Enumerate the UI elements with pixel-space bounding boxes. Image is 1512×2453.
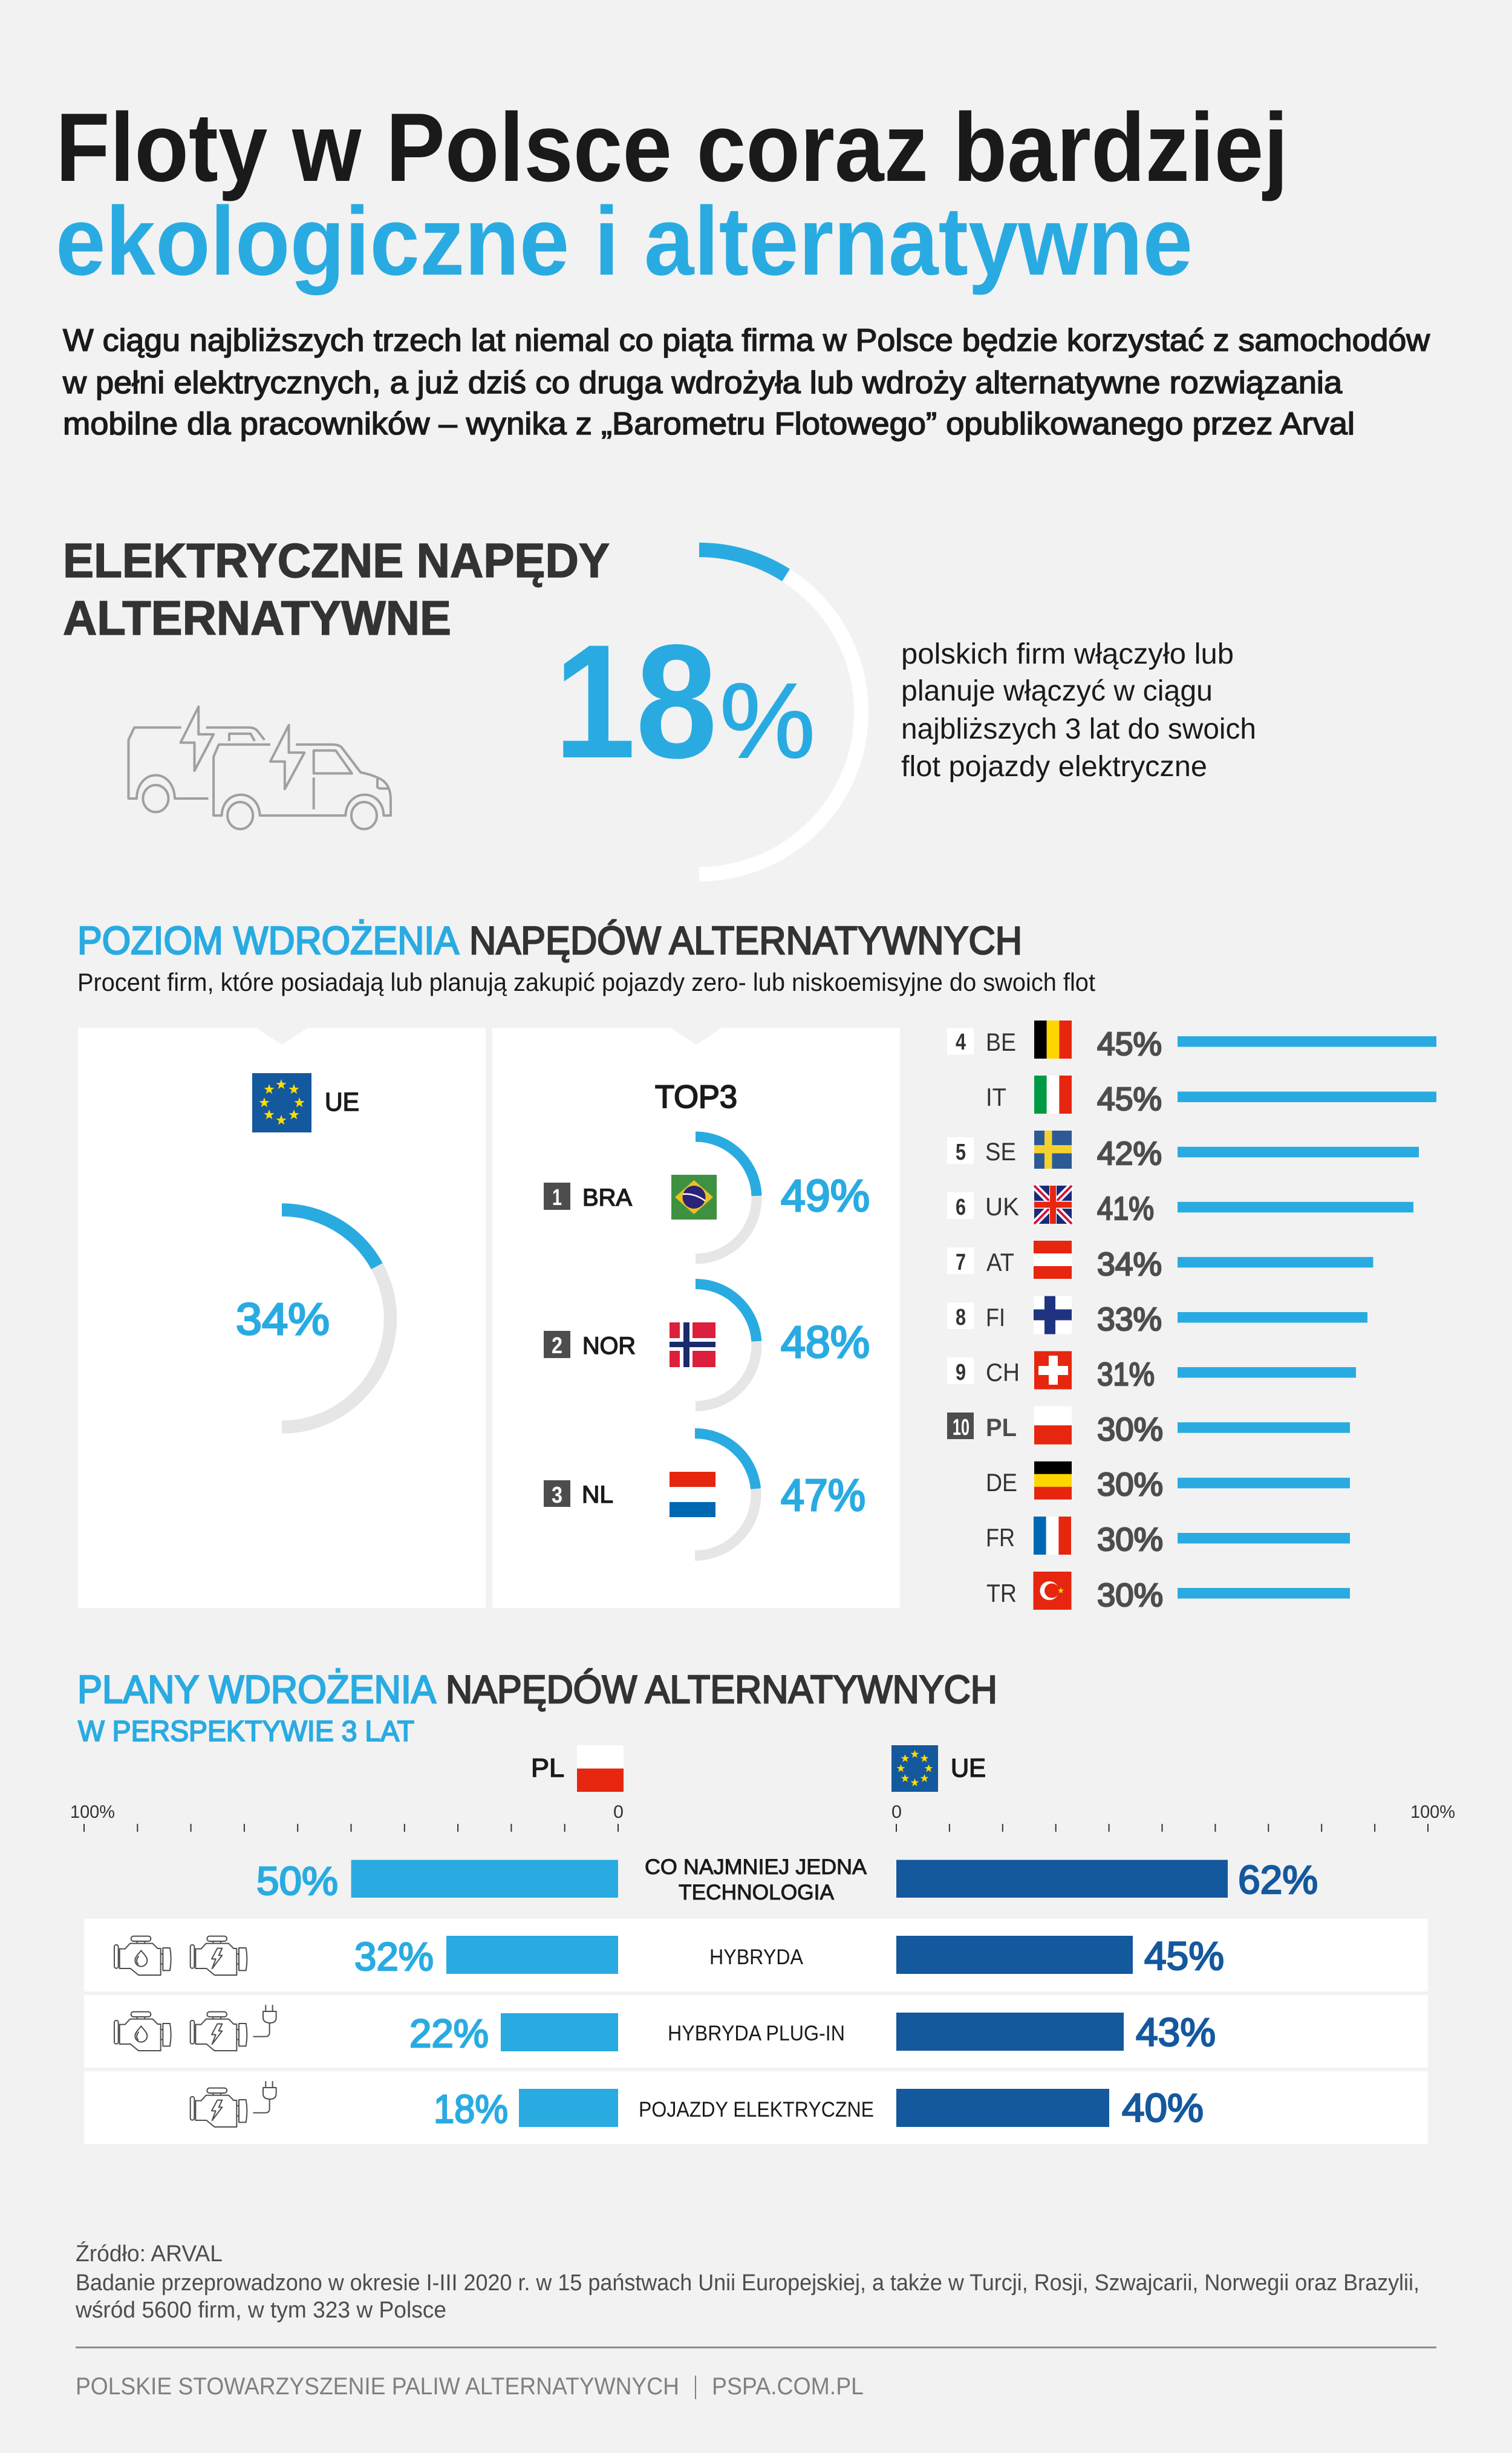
row: DE 30%: DE — [986, 1468, 1017, 1497]
row: PL 30%: PL — [986, 1413, 1017, 1442]
row: hybryda plug-in — [84, 1995, 1428, 2068]
row: FR 30%: FR — [986, 1523, 1015, 1552]
ranking list: countries — [947, 1021, 1436, 1613]
row: FI 33%: FI — [986, 1303, 1005, 1331]
footer: PSPA.COM.PL — [712, 2373, 864, 2400]
rank 1: Brazil — [544, 1137, 870, 1259]
row: IT 45%: 45% — [1097, 1081, 1162, 1117]
heading: poziom wdrożenia — [77, 918, 1022, 962]
source note — [75, 2241, 1419, 2323]
icon: electric engine with plug — [191, 2082, 276, 2127]
row: SE 42%: SE — [985, 1137, 1016, 1166]
row: co najmniej jedna technologia: 50% — [256, 1858, 338, 1903]
row: hybryda: 32% — [354, 1934, 434, 1979]
row: IT 45% — [986, 1076, 1436, 1117]
row: FI 33%: 8 — [956, 1305, 966, 1330]
row: CH 31% — [947, 1351, 1356, 1393]
row: AT 34%: 34% — [1097, 1246, 1162, 1282]
row: hybryda — [84, 1919, 1428, 1991]
row: SE 42%: 42% — [1097, 1135, 1162, 1172]
row: UK 41%: UK — [985, 1192, 1019, 1221]
row: co najmniej jedna technologia: TECHNOLOGIA — [679, 1881, 835, 1904]
text: 18% description: flot pojazdy elektryczne — [901, 751, 1207, 783]
rank 3: Netherlands: 47% — [781, 1470, 865, 1520]
icon: EU flag — [252, 1073, 311, 1132]
row: BE 45%: BE — [986, 1028, 1016, 1056]
source note: wśród 5600 firm, w tym 323 w Polsce — [75, 2298, 446, 2323]
big number 18%: 18 — [554, 610, 717, 792]
axis: UE: 0 — [891, 1802, 902, 1822]
row: pojazdy elektryczne: POJAZDY ELEKTRYCZNE — [639, 2098, 874, 2121]
row: FI 33%: 33% — [1097, 1301, 1162, 1338]
subheading: w perspektywie 3 lat: W PERSPEKTYWIE 3 LAT — [78, 1716, 414, 1748]
text: 18% description: polskich firm włączyło lub — [901, 638, 1234, 670]
icon: combustion and electric engines — [114, 1936, 247, 1975]
row: IT 45%: IT — [986, 1083, 1006, 1111]
rank 1: Brazil: BRA — [582, 1184, 632, 1211]
title: ekologiczne i alternatywne — [56, 187, 1193, 296]
row: TR 30%: 30% — [1097, 1577, 1163, 1613]
rank 3: Netherlands: NL — [582, 1481, 613, 1508]
subheading: poziom wdrożenia: Procent firm, które posiadają lub planują zakupić pojazdy zero- lub niskoemisyjne do swoich flot — [77, 968, 1095, 996]
rank 2: Norway: NOR — [582, 1333, 636, 1359]
row: UK 41%: 6 — [956, 1195, 966, 1220]
axis: UE: 100% — [1410, 1802, 1455, 1822]
rank 2: Norway: 48% — [781, 1317, 870, 1367]
row: TR 30% — [986, 1572, 1350, 1613]
row: UK 41% — [947, 1186, 1413, 1227]
row: PL 30% — [947, 1406, 1350, 1448]
heading: poziom wdrożenia: POZIOM WDROŻENIA — [77, 918, 460, 962]
axis: PL — [70, 1802, 624, 1832]
row: TR 30%: TR — [986, 1579, 1017, 1607]
axis: UE — [891, 1802, 1455, 1832]
row: DE 30%: 30% — [1097, 1466, 1163, 1503]
big number 18% — [554, 610, 815, 792]
intro text — [62, 323, 1430, 442]
title — [56, 93, 1288, 296]
row: FR 30%: 30% — [1097, 1521, 1163, 1558]
row: hybryda: HYBRYDA — [709, 1945, 804, 1969]
row: BE 45% — [947, 1021, 1436, 1062]
row: co najmniej jedna technologia: 62% — [1238, 1857, 1318, 1902]
heading: plany wdrożenia — [77, 1667, 997, 1711]
row: co najmniej jedna technologia — [256, 1855, 1318, 1904]
row: co najmniej jedna technologia: CO NAJMNIEJ JEDNA — [645, 1855, 867, 1879]
axis: PL: 0 — [613, 1802, 624, 1822]
icon: engines with plug — [114, 2005, 276, 2051]
text: 18% description: planuje włączyć w ciągu — [901, 675, 1213, 707]
intro text: mobilne dla pracowników – wynika z „Barometru Flotowego” opublikowanego przez Arval — [63, 407, 1355, 442]
row: pojazdy elektryczne: 40% — [1122, 2085, 1204, 2130]
row: BE 45%: 4 — [956, 1030, 966, 1055]
heading: plany wdrożenia: PLANY WDROŻENIA — [77, 1667, 437, 1711]
legend: UE — [891, 1745, 986, 1792]
row: hybryda plug-in: HYBRYDA PLUG-IN — [668, 2022, 845, 2045]
icon: electric vans — [128, 707, 391, 829]
row: FI 33% — [947, 1296, 1367, 1338]
row: AT 34%: 7 — [956, 1250, 966, 1275]
heading: plany wdrożenia: NAPĘDÓW ALTERNATYWNYCH — [446, 1667, 997, 1711]
source note: Badanie przeprowadzono w okresie I-III 2020 r. w 15 państwach Unii Europejskiej, a także w Turcji, Rosji, Szwajcarii, Norwegii oraz Brazylii, — [76, 2270, 1419, 2296]
legend: PL: PL — [531, 1754, 564, 1783]
axis: PL: 100% — [70, 1802, 115, 1822]
row: FR 30% — [986, 1517, 1350, 1558]
text: 18% description — [901, 638, 1256, 783]
row: BE 45%: 45% — [1097, 1026, 1162, 1062]
heading: elektryczne napędy alternatywne — [63, 534, 610, 645]
row: hybryda plug-in: 22% — [409, 2011, 489, 2056]
row: AT 34% — [947, 1241, 1373, 1282]
row: SE 42%: 5 — [956, 1140, 966, 1165]
row: AT 34%: AT — [986, 1248, 1014, 1276]
heading: poziom wdrożenia: NAPĘDÓW ALTERNATYWNYCH — [469, 918, 1022, 962]
ring chart: 18% — [699, 550, 861, 874]
row: PL 30%: 30% — [1097, 1411, 1163, 1448]
intro text: w pełni elektrycznych, a już dziś co druga wdrożyła lub wdroży alternatywne rozwiązania — [62, 365, 1342, 400]
row: PL 30%: 10 — [953, 1415, 969, 1440]
row: CH 31%: 9 — [956, 1360, 966, 1385]
row: CH 31%: CH — [986, 1358, 1020, 1387]
value: 34%: 34% — [236, 1294, 330, 1344]
label: UE: UE — [325, 1088, 359, 1117]
legend: PL — [531, 1745, 624, 1792]
rank 2: Norway: 2 — [552, 1333, 562, 1359]
rank 1: Brazil: 1 — [552, 1185, 562, 1210]
rank 2: Norway — [544, 1284, 870, 1406]
row: pojazdy elektryczne: 18% — [434, 2086, 508, 2131]
footer: POLSKIE STOWARZYSZENIE PALIW ALTERNATYWNYCH — [76, 2373, 679, 2400]
heading: elektryczne napędy alternatywne: ALTERNATYWNE — [63, 591, 451, 645]
big number 18%: % — [720, 662, 815, 780]
row: hybryda: 45% — [1144, 1933, 1224, 1978]
intro text: W ciągu najbliższych trzech lat niemal co piąta firma w Polsce będzie korzystać z samochodów — [63, 323, 1430, 358]
rank 1: Brazil: 49% — [781, 1171, 870, 1221]
source note: Źródło: ARVAL — [76, 2241, 223, 2267]
row: UK 41%: 41% — [1097, 1191, 1154, 1227]
heading: TOP3: TOP3 — [655, 1079, 737, 1115]
row: CH 31%: 31% — [1097, 1356, 1155, 1393]
row: pojazdy elektryczne — [84, 2071, 1428, 2144]
ring chart: 34% — [282, 1210, 391, 1427]
text: 18% description: najbliższych 3 lat do swoich — [901, 713, 1256, 745]
title: Floty w Polsce coraz bardziej — [56, 93, 1288, 202]
heading: elektryczne napędy alternatywne: ELEKTRYCZNE NAPĘDY — [63, 534, 610, 587]
panel: TOP3 — [492, 1028, 900, 1608]
row: hybryda plug-in: 43% — [1136, 2010, 1216, 2054]
legend: UE: UE — [951, 1754, 986, 1783]
panel: UE — [78, 1028, 486, 1608]
rank 3: Netherlands — [544, 1434, 865, 1556]
rank 3: Netherlands: 3 — [552, 1483, 562, 1508]
row: SE 42% — [947, 1131, 1419, 1172]
row: DE 30% — [986, 1462, 1350, 1503]
